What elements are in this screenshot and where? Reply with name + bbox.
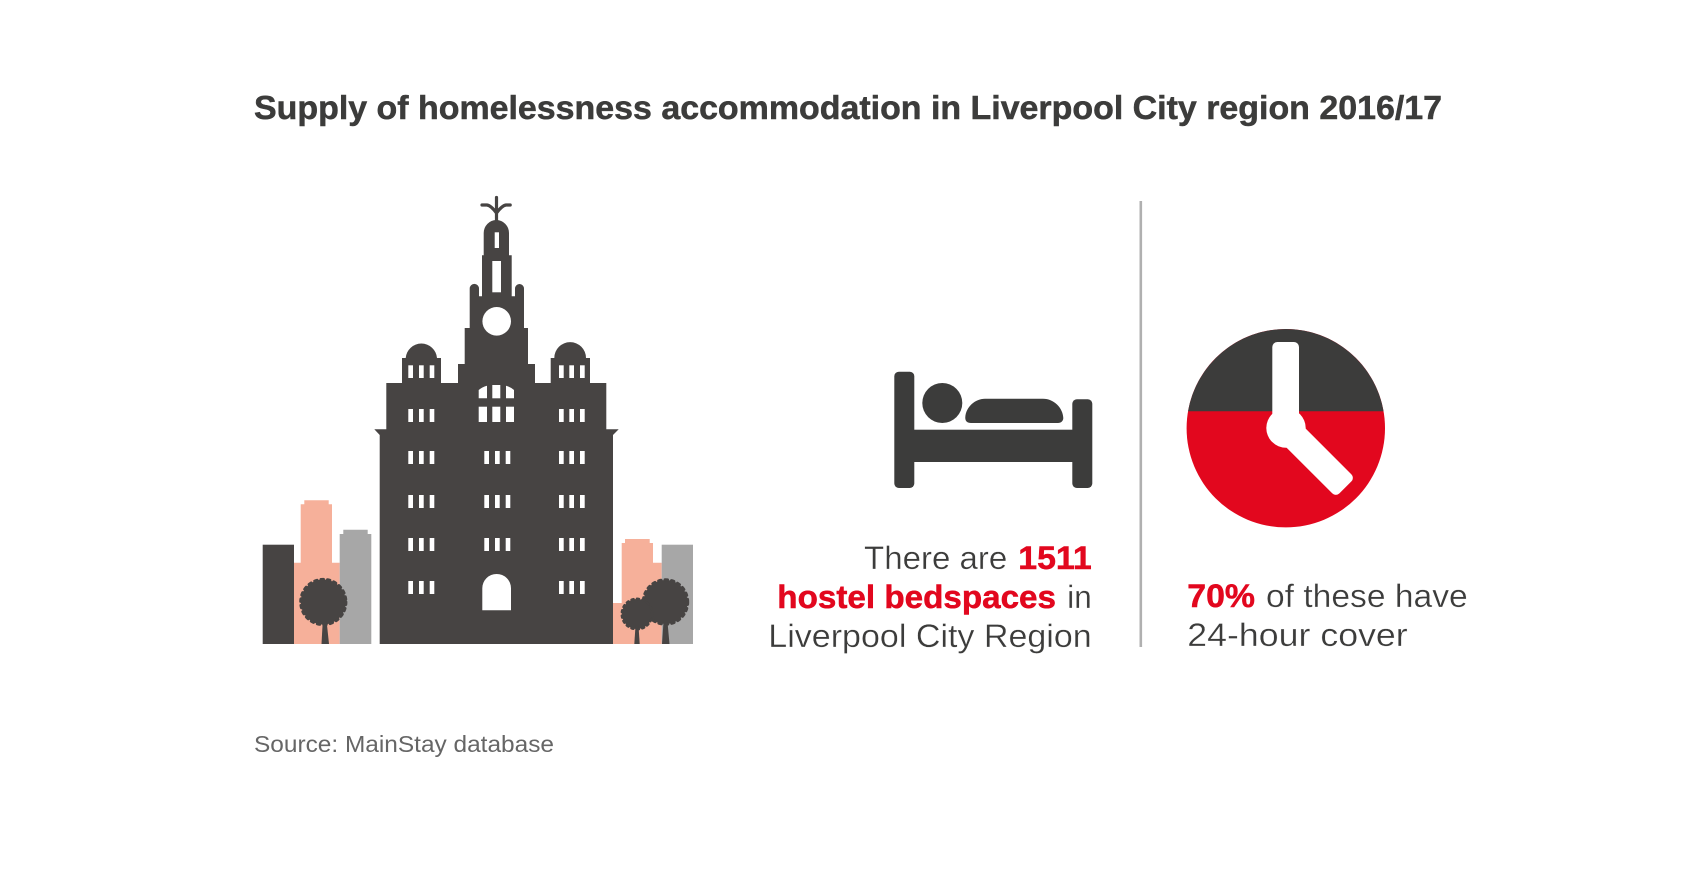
illustration: Liverpool skyline xyxy=(263,198,693,644)
text: 24-hour cover: of these have xyxy=(1266,578,1468,614)
clock face and tower windows xyxy=(482,232,511,336)
arched central window xyxy=(479,385,514,422)
tree left xyxy=(301,579,346,644)
text: hostel bedspaces: in xyxy=(1067,579,1092,615)
left skyline buildings xyxy=(263,500,371,644)
text: 24-hour cover xyxy=(1187,578,1468,653)
source note: Source: MainStay database xyxy=(254,731,554,757)
trees right xyxy=(622,580,688,644)
liver bird xyxy=(482,198,510,221)
text: 24-hour cover: 24-hour cover xyxy=(1187,617,1408,653)
building silhouette xyxy=(374,220,619,644)
window rows xyxy=(408,365,585,594)
right skyline buildings xyxy=(613,539,693,644)
icon: bed with person xyxy=(894,372,1092,488)
divider xyxy=(1140,201,1142,647)
text: hostel bedspaces: hostel bedspaces xyxy=(777,579,1056,615)
title: Supply of homelessness accommodation in Liverpool City region 2016/17 xyxy=(254,89,1442,126)
icon: clock 70 percent xyxy=(1187,329,1385,527)
text: 24-hour cover: 70% xyxy=(1187,578,1255,614)
text: hostel bedspaces: There are xyxy=(864,540,1007,576)
Royal Liver Building xyxy=(374,198,619,644)
text: hostel bedspaces: Liverpool City Region xyxy=(768,618,1092,654)
text: hostel bedspaces xyxy=(768,540,1092,654)
arched door xyxy=(482,574,511,610)
text: hostel bedspaces: 1511 xyxy=(1018,540,1092,576)
